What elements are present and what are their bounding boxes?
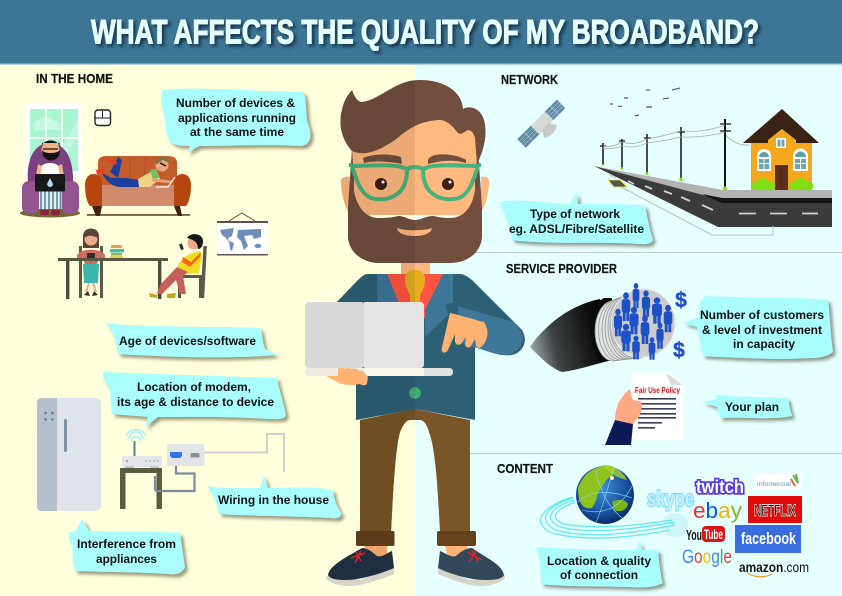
beard: [348, 150, 482, 263]
callout: interference from appliances: [69, 519, 185, 574]
callout: wiring in the house: [207, 475, 341, 518]
callout: interference from appliances: appliances: [96, 552, 157, 566]
heading: service provider: SERVICE PROVIDER: [506, 262, 617, 276]
heading: network: NETWORK: [501, 73, 558, 87]
section dividers: [470, 252, 842, 454]
icon: modem on table: [120, 430, 162, 509]
face: [352, 112, 478, 215]
logo: small top right: infomercial: [757, 481, 792, 488]
icon: clock: [95, 110, 110, 126]
dollar signs: [673, 289, 687, 362]
icon: wall socket and wiring: [155, 434, 284, 491]
logo: small top right: [756, 474, 801, 489]
callout: type of network: eg. ADSL/Fibre/Satellite: [509, 222, 644, 236]
icon: wall map: [217, 213, 268, 256]
cuffs: [356, 531, 394, 546]
button: [409, 387, 421, 399]
callout: location of modem: Location of modem,: [137, 380, 251, 394]
glasses: [349, 165, 481, 199]
logo: youtube: Tube: [704, 526, 723, 542]
heading: in the home: IN THE HOME: [36, 72, 113, 86]
ankles: [364, 546, 468, 558]
icon: globe: [576, 465, 634, 524]
shoes: [326, 548, 505, 586]
callout: interference from appliances: Interference from: [77, 537, 176, 551]
logo: ebay: ebay: [693, 498, 742, 523]
background: left half: [0, 0, 415, 596]
callout: location and quality of connection: [536, 541, 663, 587]
callout: number of customers: Number of customers: [700, 308, 824, 322]
desk with woman on phone and books: [58, 228, 168, 299]
callout: type of network: Type of network: [530, 207, 620, 221]
callout: number of customers: & level of investment: [702, 323, 822, 337]
pointing hand: [442, 313, 488, 353]
callout: age of devices: [106, 323, 277, 357]
sleeve: [458, 306, 523, 355]
callout: location of modem: [103, 372, 286, 427]
callout: location and quality of connection: of connection: [560, 568, 638, 582]
laptop and holding hand: [305, 302, 453, 386]
logo: netflix: [748, 496, 802, 523]
sofa with person lying on laptop: [85, 156, 191, 216]
trousers: [360, 409, 470, 532]
icon: fibre cable with customers: [530, 283, 675, 372]
heading: content: CONTENT: [497, 462, 553, 476]
callout: location and quality of connection: Location & quality: [547, 554, 651, 568]
presenter figure: [337, 80, 525, 558]
callout: number of devices: Number of devices &: [176, 96, 295, 110]
callout: age of devices: Age of devices/software: [119, 334, 256, 348]
eyes: [375, 178, 387, 190]
logo: skype: skype: [647, 486, 694, 511]
tie: [405, 270, 425, 320]
neck: [401, 255, 430, 279]
dollar signs: $: [673, 339, 685, 362]
callout: your plan: [702, 395, 792, 418]
ears: [341, 177, 489, 212]
callout: your plan: Your plan: [725, 400, 779, 414]
background: right half: [415, 0, 842, 596]
boy on chair with phone: [149, 234, 207, 298]
callout: number of devices: at the same time: [190, 125, 284, 139]
callout: number of customers: in capacity: [733, 337, 795, 351]
callout: number of devices: [161, 89, 310, 153]
birds: [610, 88, 680, 116]
logo: netflix: NETFLIX: [754, 501, 796, 520]
logo: google: Google: [682, 547, 732, 568]
logo: facebook: [735, 525, 801, 553]
shirt: [387, 274, 443, 318]
icon: satellite: [517, 100, 572, 154]
icon: house: [743, 109, 819, 190]
icon: fridge: [37, 398, 101, 511]
dollar signs: $: [675, 289, 687, 312]
armchair with man on laptop: [20, 140, 80, 218]
callout: wiring in the house: Wiring in the house: [218, 493, 329, 507]
logo: youtube: You: [686, 527, 702, 544]
icon: fair use policy document and hand: [605, 373, 683, 445]
icon: swoosh around globe: [541, 497, 688, 538]
callout: location of modem: its age & distance to device: [117, 395, 274, 409]
eyebrows: [363, 154, 466, 164]
logo: youtube: [686, 526, 725, 544]
logo: facebook: facebook: [741, 529, 796, 548]
lapels: [377, 274, 453, 337]
logo: amazon: amazon.com: [739, 560, 809, 575]
callout: type of network: [499, 192, 653, 244]
callout: number of customers: [683, 296, 833, 359]
header band: [0, 0, 842, 64]
logo: twitch: twitch: [696, 477, 744, 497]
road with pavement and poles: [594, 119, 832, 235]
callout: number of devices: applications running: [178, 111, 296, 125]
figure left-half shading: [337, 80, 415, 556]
hair: [340, 80, 486, 165]
jacket: [337, 274, 525, 420]
icon: window: [24, 104, 83, 177]
mouth: [397, 228, 432, 236]
icon: fair use policy document and hand: Fair Use Policy: [635, 386, 681, 395]
